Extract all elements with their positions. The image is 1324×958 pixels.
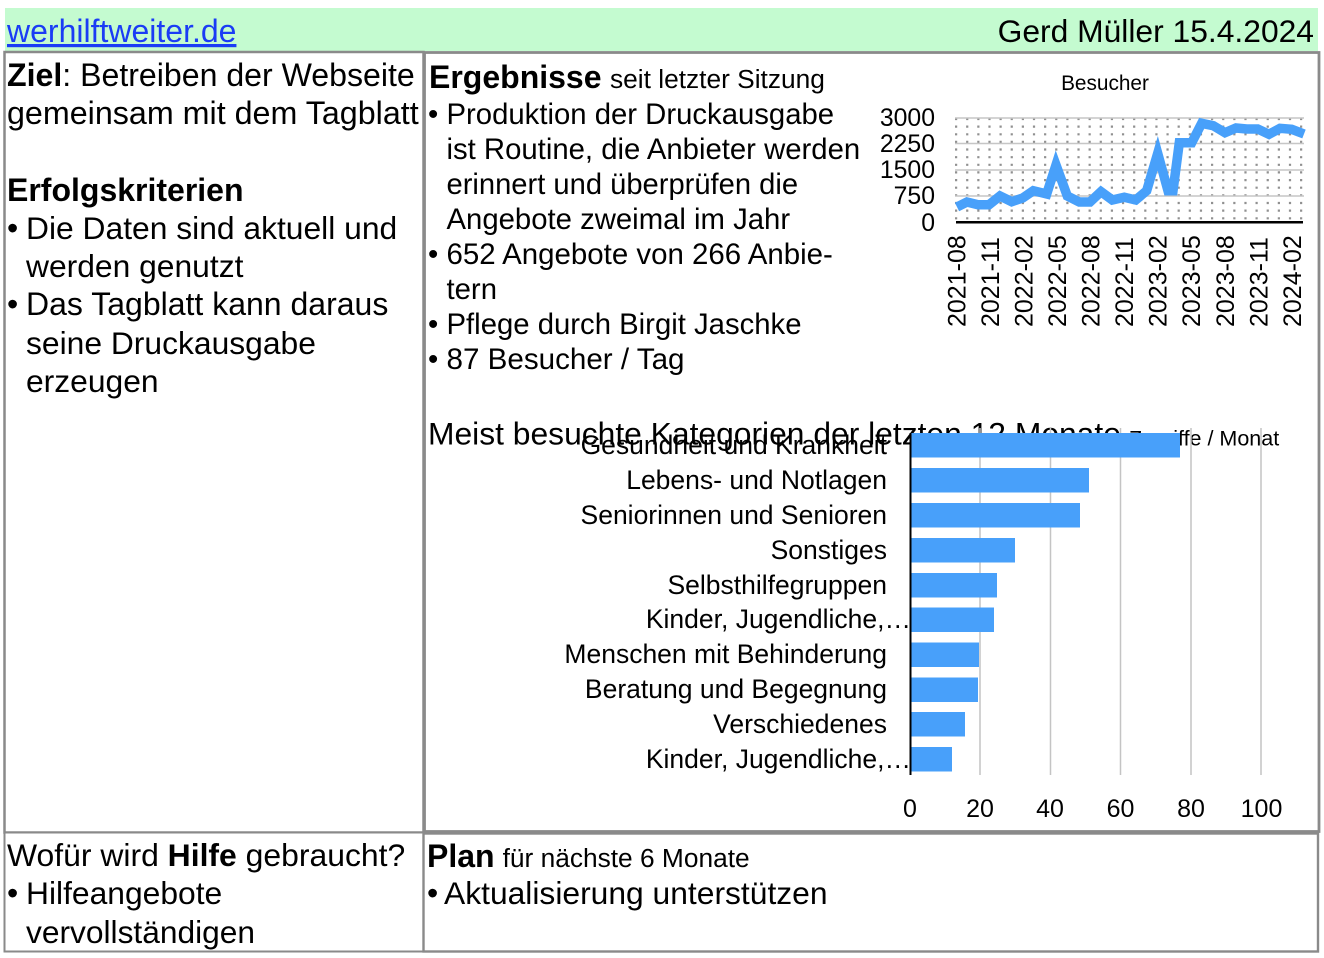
results list: 652 Angebote von 266 Anbie- xyxy=(446,238,833,271)
results list: Pflege durch Birgit Jaschke xyxy=(446,308,802,341)
results list: Produktion der Druckausgabe xyxy=(446,98,834,131)
x axis labels: 100 xyxy=(1241,795,1282,823)
plan list: Aktualisierung unterstützen xyxy=(444,875,828,911)
category labels: Kinder, Jugendliche,… xyxy=(646,604,911,634)
category labels: Sonstiges xyxy=(771,535,887,565)
x axis line xyxy=(956,221,1303,224)
category labels: Menschen mit Behinderung xyxy=(564,639,887,669)
y axis labels xyxy=(880,105,935,237)
help list: • xyxy=(7,875,18,911)
x axis labels: 2022-11 xyxy=(1111,237,1139,327)
website link: werhilftweiter.de xyxy=(6,13,236,49)
help list: vervollständigen xyxy=(26,914,255,950)
results heading: Ergebnisse seit letzter Sitzung xyxy=(429,59,825,95)
results list: • xyxy=(428,343,438,376)
x axis labels: 60 xyxy=(1107,795,1134,823)
dotted grid xyxy=(955,119,1304,218)
y axis labels: 2250 xyxy=(880,131,935,158)
category labels: Lebens- und Notlagen xyxy=(626,465,887,495)
success criteria list: • xyxy=(7,286,18,322)
success criteria heading: Erfolgskriterien xyxy=(7,172,244,208)
bars xyxy=(911,433,1180,772)
help heading: Wofür wird Hilfe gebraucht? xyxy=(7,837,405,873)
x axis labels: 2023-02 xyxy=(1144,235,1172,327)
x axis labels: 2022-05 xyxy=(1044,235,1072,327)
results list: 87 Besucher / Tag xyxy=(446,343,685,376)
results list: tern xyxy=(446,273,497,306)
category labels: Beratung und Begegnung xyxy=(585,674,887,704)
author and date: Gerd Müller 15.4.2024 xyxy=(998,13,1314,49)
plan list: • xyxy=(427,875,438,911)
goal text: Ziel: Betreiben der Webseite xyxy=(7,57,415,93)
results list: • xyxy=(428,238,438,271)
results list: erinnert und überprüfen die xyxy=(446,169,798,201)
results list: • xyxy=(428,98,438,131)
success criteria list: seine Druckausgabe xyxy=(26,325,316,361)
x axis labels: 2023-11 xyxy=(1246,237,1274,327)
axis caption: Zugriffe / Monat xyxy=(1129,426,1279,450)
category labels: Selbsthilfegruppen xyxy=(667,570,887,600)
visitors series xyxy=(957,123,1304,207)
help list: Hilfeangebote xyxy=(26,875,222,911)
results list: ist Routine, die Anbieter werden xyxy=(446,133,860,166)
success criteria list: Das Tagblatt kann daraus xyxy=(26,286,388,322)
x axis labels xyxy=(903,795,1282,823)
category labels: Verschiedenes xyxy=(713,709,887,739)
x axis labels xyxy=(944,235,1307,327)
panel: results xyxy=(424,52,1319,832)
x axis labels: 40 xyxy=(1036,795,1064,823)
panel: goal and success criteria: gemeinsam mit dem Tagblatt xyxy=(7,95,419,131)
x axis labels: 0 xyxy=(903,795,917,823)
x axis labels: 20 xyxy=(966,795,994,823)
y axis labels: 750 xyxy=(894,183,935,210)
chart title: Besucher xyxy=(1061,72,1149,95)
panel: plan xyxy=(424,834,1318,952)
results list: • xyxy=(428,308,438,341)
category labels: Gesundheit und Krankheit xyxy=(581,430,888,460)
category labels xyxy=(564,430,911,774)
success criteria list: erzeugen xyxy=(26,363,159,399)
x axis labels: 2021-11 xyxy=(977,237,1005,327)
y axis labels: 1500 xyxy=(880,157,935,184)
success criteria list: werden genutzt xyxy=(25,248,244,284)
category labels: Seniorinnen und Senioren xyxy=(581,500,887,530)
x axis labels: 2022-08 xyxy=(1078,235,1106,327)
vertical grid xyxy=(980,428,1261,775)
results list: Angebote zweimal im Jahr xyxy=(446,203,790,236)
bar chart heading: Meist besuchte Kategorien der letzten 12 Monate xyxy=(428,416,1121,452)
y axis line xyxy=(910,433,912,775)
success criteria list: • xyxy=(7,210,18,246)
success criteria list: Die Daten sind aktuell und xyxy=(26,210,397,246)
solid grid xyxy=(955,118,1304,196)
help list xyxy=(7,875,255,950)
x axis labels: 2023-08 xyxy=(1212,235,1240,327)
header band xyxy=(5,8,1318,51)
x axis labels: 80 xyxy=(1177,795,1205,823)
x axis labels: 2023-05 xyxy=(1178,235,1206,327)
panel: help needed xyxy=(4,832,424,952)
x axis labels: 2022-02 xyxy=(1010,235,1038,327)
category labels: Kinder, Jugendliche,… xyxy=(646,744,911,774)
panel: goal and success criteria xyxy=(4,52,424,832)
bar chart: most visited categories xyxy=(564,426,1282,823)
x axis labels: 2021-08 xyxy=(944,235,972,327)
plan heading: Plan für nächste 6 Monate xyxy=(427,838,750,874)
line chart: visitors xyxy=(880,72,1307,327)
results list xyxy=(428,98,860,376)
x axis labels: 2024-02 xyxy=(1279,235,1307,327)
y axis labels: 3000 xyxy=(880,105,935,132)
success criteria list xyxy=(7,210,397,399)
y axis labels: 0 xyxy=(921,210,935,237)
